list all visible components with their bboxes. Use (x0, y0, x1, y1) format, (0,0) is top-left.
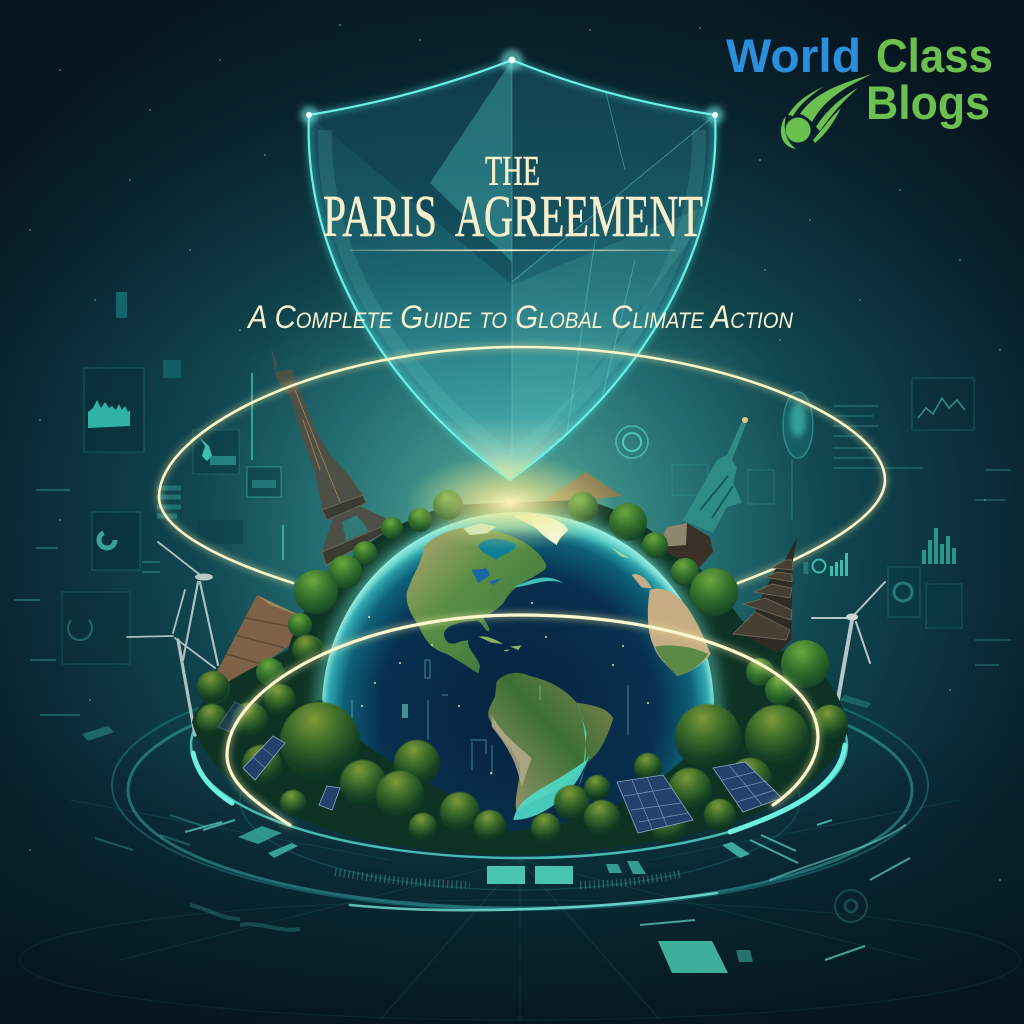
globe ocean (322, 512, 714, 832)
continent: Greenland (530, 517, 568, 545)
HUD: data box two (247, 467, 281, 497)
landmark: Statue of Liberty (658, 417, 748, 570)
north glow (513, 514, 563, 545)
continent: Central Africa (655, 645, 708, 676)
HUD: small tile left (116, 292, 127, 318)
faded ground glyphs (190, 890, 867, 930)
platform tiles (82, 695, 910, 973)
shield node top (501, 49, 523, 71)
HUD: vertical lines left (252, 373, 283, 560)
title: Paris Agreement: PARIS (323, 183, 437, 249)
sun glow (405, 455, 615, 551)
platform bright arcs (193, 745, 905, 910)
wind turbine: left front (127, 590, 215, 735)
logo (726, 29, 993, 149)
solar panel: left (243, 736, 285, 780)
continental shelf glow (513, 578, 590, 787)
platform rings (20, 632, 1020, 1020)
bottom glow tip (513, 760, 587, 820)
subtitle: A Complete Guide to Global Climate Action (246, 299, 793, 335)
continent: Hudson Bay (478, 539, 517, 560)
continent: North America (407, 527, 546, 673)
HUD: bar chart small (830, 553, 848, 576)
trees: rear ridge (198, 490, 847, 739)
orbit ring: upper (159, 347, 885, 583)
solar panel: far left (218, 702, 245, 732)
landmark: Eiffel Tower (271, 348, 395, 565)
HUD: data box (193, 430, 239, 474)
continents (407, 514, 711, 820)
title: Paris Agreement: AGREEMENT (455, 183, 703, 249)
continent: South America (488, 673, 613, 812)
landmark: pyramid rear (535, 472, 622, 506)
continent: Andes (492, 715, 532, 787)
logo: Class: Class (876, 29, 993, 82)
globe (322, 512, 714, 832)
logo: World: World (726, 29, 861, 82)
continent: Great Lakes (472, 568, 502, 585)
HUD: circular dial centre (616, 426, 648, 458)
shield outline glow (309, 60, 715, 480)
HUD: bars left (157, 488, 181, 516)
HUD: text lines right (833, 406, 1011, 665)
continent: Africa (648, 589, 711, 676)
shield body (309, 60, 715, 480)
shield node right (706, 106, 724, 124)
HUD: bar chart right (922, 528, 956, 564)
HUD: panels centre right (672, 465, 774, 504)
HUD: side lines left (14, 490, 160, 715)
HUD: gauge (62, 592, 130, 664)
shield (300, 49, 724, 480)
landmark: pyramid left (215, 595, 305, 688)
background particles (30, 25, 1000, 880)
wind turbine: left rear (158, 542, 218, 665)
shield facets (309, 60, 720, 480)
continent: Arctic land (463, 523, 497, 535)
shield node left (300, 106, 318, 124)
HUD: faint panel left (197, 520, 243, 544)
shield outline (309, 60, 715, 480)
HUD: panel right (888, 567, 920, 617)
wind turbine: right (812, 582, 885, 705)
logo: comet icon (781, 74, 872, 149)
solar panel: centre (617, 775, 693, 833)
title: The: THE (485, 149, 540, 195)
ground mound (192, 500, 848, 855)
HUD: area chart left (84, 368, 144, 452)
globe data marks (352, 603, 648, 775)
logo: Blogs: Blogs (866, 76, 990, 129)
globe top sheen (350, 512, 688, 610)
landmark: pagoda (733, 537, 797, 653)
trees: front (196, 635, 848, 855)
continent: Caribbean (478, 636, 522, 652)
HUD panels background (14, 292, 1011, 715)
HUD: top tile (163, 360, 181, 378)
HUD: panel right two (926, 584, 962, 628)
title rule (350, 250, 676, 251)
solar panel: small (319, 786, 340, 810)
front tree mass (205, 700, 845, 855)
title: Paris Agreement (323, 183, 703, 249)
orbit ring: lower (227, 615, 818, 825)
HUD: circular radar (783, 392, 813, 520)
HUD: donut chart (92, 512, 140, 570)
continent: Europe coast (610, 547, 630, 558)
tree crowns (196, 635, 848, 843)
solar panels (218, 702, 782, 833)
solar panel: right (713, 762, 782, 812)
globe glow (307, 503, 729, 832)
HUD: ring gauge small (806, 560, 826, 574)
HUD: line chart right (912, 378, 974, 430)
continent: Iberia (632, 574, 652, 588)
